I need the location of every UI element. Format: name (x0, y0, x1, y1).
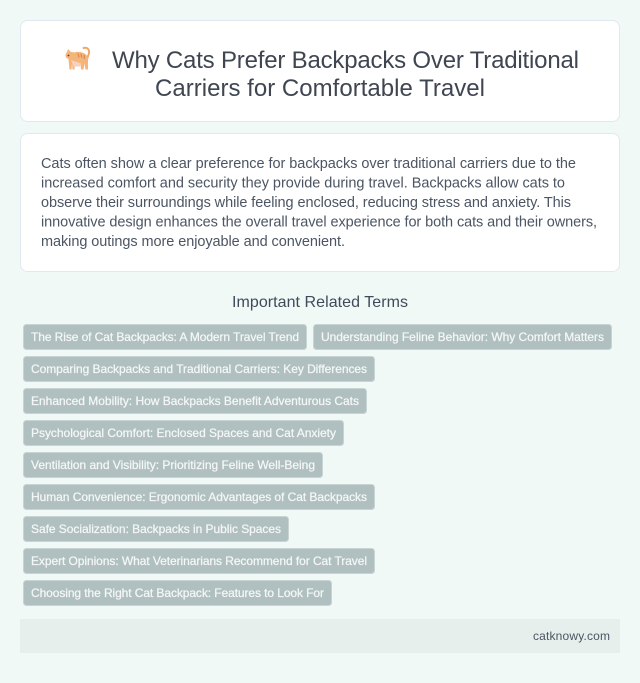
heading: important related terms: Important Related Terms (232, 294, 408, 311)
chip: psychological comfort (24, 420, 344, 446)
intro text: increased comfort and security they provide during travel. Backpacks allow cats to (41, 176, 565, 192)
panel: intro paragraph (20, 134, 620, 272)
title: Why Cats Prefer Backpacks Over Traditional (112, 47, 579, 74)
chip: expert opinions: Expert Opinions: What Veterinarians Recommend for Cat Travel (31, 554, 367, 568)
panel: title card (20, 20, 620, 122)
chip: choosing the right backpack: Choosing the Right Cat Backpack: Features to Look For (31, 586, 324, 600)
chip: rise of cat backpacks: The Rise of Cat Backpacks: A Modern Travel Trend (31, 330, 299, 344)
intro text: Cats often show a clear preference for backpacks over traditional carriers due to the (41, 156, 576, 172)
chip: understanding feline behavior (314, 324, 612, 350)
chip: psychological comfort: Psychological Comfort: Enclosed Spaces and Cat Anxiety (31, 426, 336, 440)
chip: safe socialization: Safe Socialization: Backpacks in Public Spaces (31, 522, 281, 536)
chip: choosing the right backpack (24, 580, 332, 606)
chip: safe socialization (24, 516, 288, 542)
panel: term chips (24, 324, 612, 606)
chip: understanding feline behavior: Understanding Feline Behavior: Why Comfort Matters (321, 330, 604, 344)
intro text: making outings more enjoyable and convenient. (41, 234, 345, 250)
chip: enhanced mobility: Enhanced Mobility: How Backpacks Benefit Adventurous Cats (31, 394, 359, 408)
intro text (41, 156, 597, 250)
intro text: observe their surroundings while feeling enclosed, reducing stress and anxiety. This (41, 195, 571, 211)
chip: comparing backpacks (24, 356, 374, 382)
chip: expert opinions (24, 548, 374, 574)
icon: orange cat (66, 48, 89, 70)
chip: rise of cat backpacks (24, 324, 306, 350)
chip: comparing backpacks: Comparing Backpacks and Traditional Carriers: Key Differences (31, 362, 367, 376)
title (112, 47, 579, 102)
intro text: innovative design enhances the overall travel experience for both cats and their owners, (41, 214, 597, 230)
chip: human convenience (24, 484, 374, 510)
chip: enhanced mobility (24, 388, 366, 414)
chip: human convenience: Human Convenience: Ergonomic Advantages of Cat Backpacks (31, 490, 367, 504)
footer bar (20, 619, 620, 653)
footer bar: catknowy.com (533, 629, 610, 643)
chip: ventilation and visibility: Ventilation and Visibility: Prioritizing Feline Well-Being (31, 458, 315, 472)
chip: ventilation and visibility (24, 452, 322, 478)
title: Carriers for Comfortable Travel (155, 75, 485, 102)
